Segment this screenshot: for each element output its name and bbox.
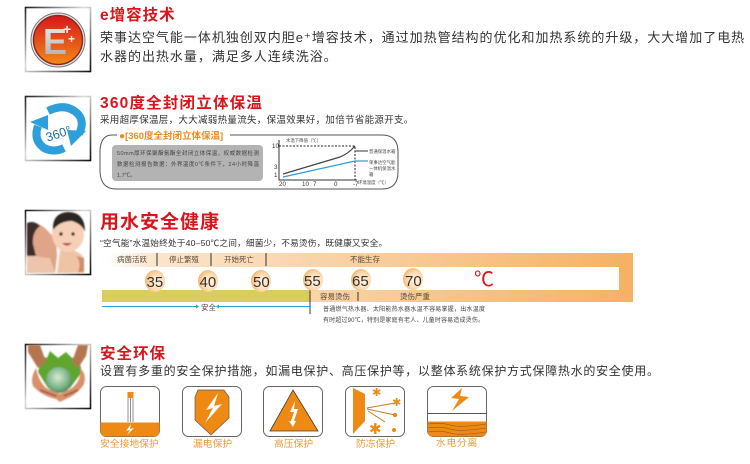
grey note box <box>112 145 263 181</box>
temperature markers: 65 <box>352 273 369 290</box>
icon: E+ badge: + <box>63 21 71 37</box>
unit: degrees celsius: ℃ <box>474 269 494 291</box>
icon: 360 degrees: 360° <box>44 123 73 145</box>
icon: high voltage protection <box>264 386 322 436</box>
panel: 360 insulation <box>100 130 398 189</box>
icon: antifreeze protection: ✱ <box>372 387 381 399</box>
temperature markers: 55 <box>304 273 321 290</box>
line chart: 水温下降值（℃） <box>286 137 321 144</box>
line chart: -7 <box>353 181 359 188</box>
icon: antifreeze protection <box>346 386 404 438</box>
line chart: 7 <box>313 181 317 188</box>
text: e增容技术 description: 水器的出热水量，满足多人连续洗浴。 <box>100 49 338 64</box>
heading: 安全环保: 安全环保 <box>100 344 166 362</box>
line chart: 箱 <box>369 171 374 178</box>
temperature markers <box>145 268 423 292</box>
temperature scale chart: 烫伤严重 <box>400 291 430 301</box>
icon: antifreeze protection: ✱ <box>392 397 401 409</box>
icon: leakage protection <box>182 386 242 436</box>
label: 漏电保护: 漏电保护 <box>193 437 232 450</box>
line chart: 普通保温水箱 <box>369 148 396 155</box>
text: e增容技术 description <box>100 30 745 64</box>
line chart: 1 <box>274 172 278 179</box>
heading: 用水安全健康: 用水安全健康 <box>100 210 220 233</box>
line chart <box>272 137 396 188</box>
line chart: 10 <box>272 143 279 150</box>
temperature scale chart: 不能生存 <box>350 254 380 264</box>
temperature markers: 35 <box>146 274 163 291</box>
temperature scale chart: 容易烫伤 <box>320 291 350 301</box>
grey note box: 数据检测报告数据：外界温度0℃条件下，24小时降温 <box>117 160 259 168</box>
scald note: 普通燃气热水器、太阳能热水器水温不容易掌握，出水温度 <box>323 305 485 313</box>
icon: E+ badge: E <box>43 21 67 62</box>
grey note box: 1.7℃。 <box>117 172 136 179</box>
temperature markers: 70 <box>405 273 422 290</box>
scald note: 有时超过90℃，特别是家庭有老人、儿童时容易造成烫伤。 <box>323 316 484 324</box>
line chart: 荣事达空气能 <box>369 159 396 166</box>
text: insulation description: 采用超厚保温层，大大减弱热量流失，保温效果好，加倍节省能源开支。 <box>100 114 414 126</box>
temperature scale chart <box>102 253 633 324</box>
icon: safe grounding <box>100 386 160 436</box>
temperature scale chart: 病菌活跃 <box>117 254 147 264</box>
temperature scale chart: 停止繁殖 <box>169 254 199 264</box>
heading: 360度全封闭立体保温: 360度全封闭立体保温 <box>100 93 263 112</box>
safe range arrow <box>102 302 310 312</box>
scald note <box>323 305 485 324</box>
label: 安全接地保护: 安全接地保护 <box>100 437 159 450</box>
label: 高压保护: 高压保护 <box>274 437 313 450</box>
text: e增容技术 description: 荣事达空气能一体机独创双内胆e⁺增容技术，通过加热管结构的优化和加热系统的升级，大大增加了电热 <box>100 30 745 45</box>
temperature markers: 50 <box>253 274 270 291</box>
label: 水电分离: 水电分离 <box>436 436 478 449</box>
line chart: 3 <box>274 164 278 171</box>
icon: antifreeze protection: ✱ <box>369 421 382 438</box>
icon: water and electricity separation <box>428 386 486 436</box>
safe range arrow: 安全 <box>201 302 216 312</box>
icon: hands holding globe <box>26 344 90 408</box>
panel title: ●[360度全封闭立体保温] <box>119 130 223 142</box>
heading: e增容技术: e增容技术 <box>100 5 176 24</box>
temperature scale chart: 开始死亡 <box>224 254 254 264</box>
text: safety description: 设置有多重的安全保护措施，如漏电保护、高压保护等，以整体系统保护方式保障热水的安全使用。 <box>100 363 660 378</box>
line chart: 0 <box>334 181 338 188</box>
label: 防冻保护: 防冻保护 <box>356 437 395 450</box>
icon: mother and baby photo <box>26 210 90 274</box>
line chart: 20 <box>279 181 286 188</box>
line chart: 一体机保温水 <box>369 165 396 172</box>
icon: E+ badge: + <box>68 32 75 46</box>
icon: 360 degrees <box>26 96 90 160</box>
safe temperature bar <box>102 290 310 302</box>
icon: E+ badge <box>26 8 90 72</box>
line chart: 环境温度（℃） <box>358 179 389 186</box>
text: water temperature description: “空气能”水温始终处于40–50℃之间，细菌少，不易烫伤，既健康又安全。 <box>100 237 387 248</box>
grey note box: 50mm厚环保聚酯氨酯全封闭立体保温，权威数据检测 <box>117 149 259 157</box>
temperature markers: 40 <box>200 274 216 291</box>
line chart: 10 <box>302 181 309 188</box>
